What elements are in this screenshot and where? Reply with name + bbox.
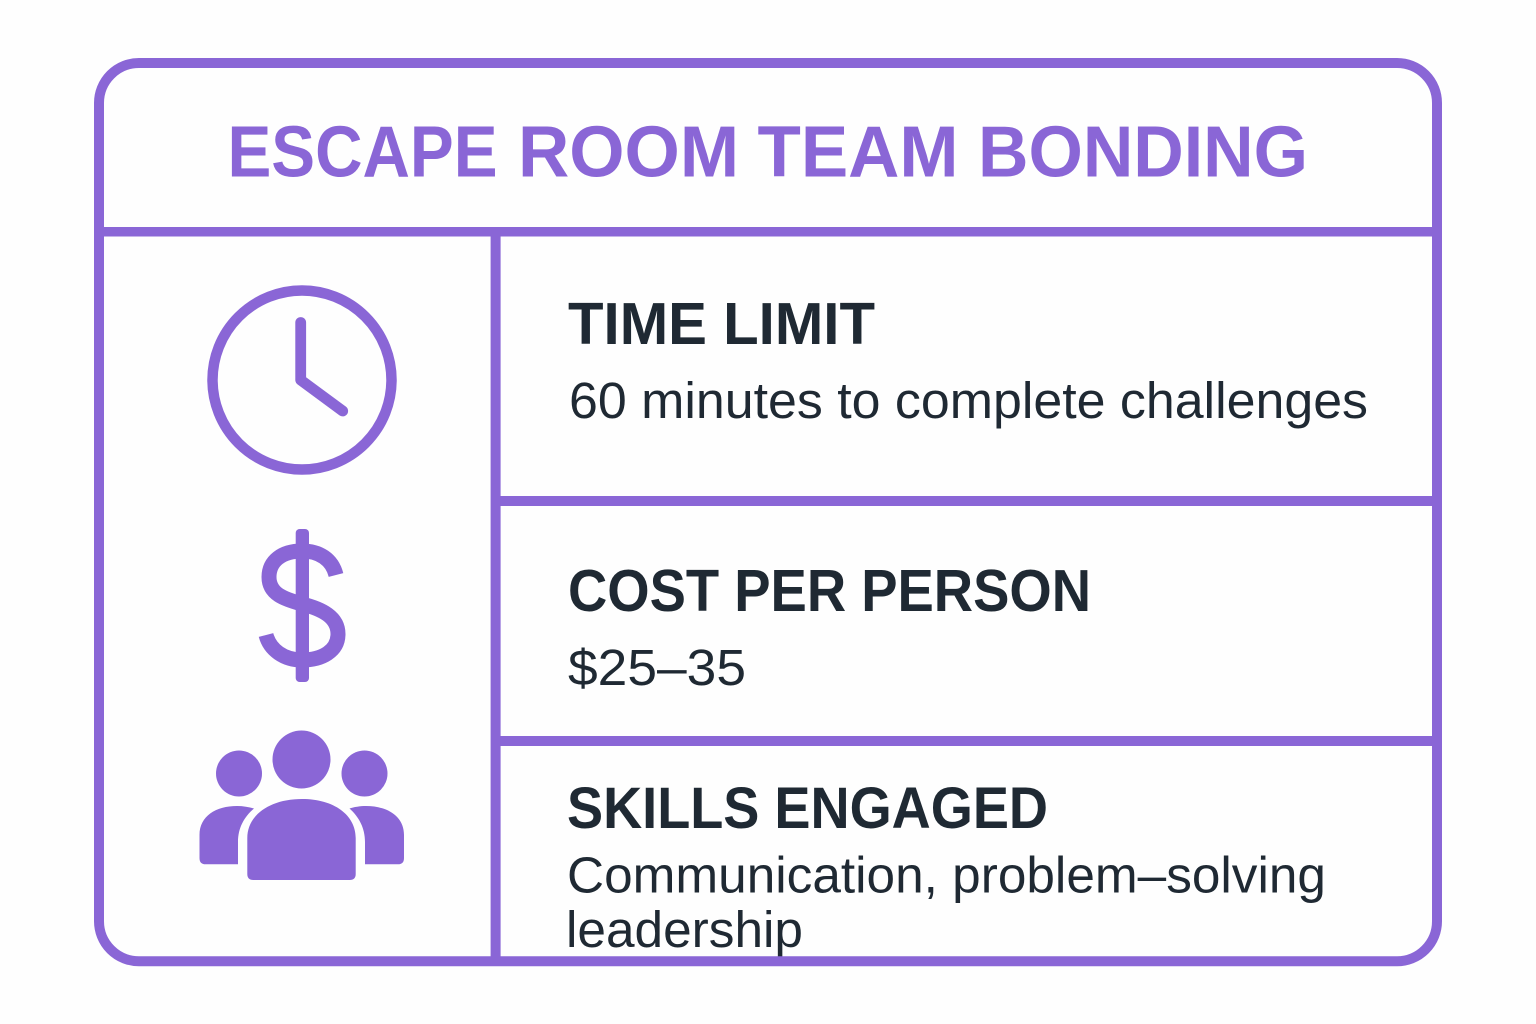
heading: skills engaged: SKILLS ENGAGED	[567, 776, 1048, 841]
text: skills detail line 1: Communication, problem–solving	[567, 846, 1326, 904]
panel: outer frame	[99, 63, 1437, 961]
icon: clock	[212, 290, 392, 470]
title: BONDING	[978, 112, 1308, 192]
icon: dollar sign	[266, 529, 338, 682]
text: time limit detail: 60 minutes to complete challenges	[569, 372, 1368, 429]
icon: team of people	[200, 730, 404, 880]
text: skills detail line 2: leadership	[566, 901, 803, 958]
heading: time limit: TIME LIMIT	[568, 291, 875, 357]
title	[228, 112, 1308, 192]
title: ESCAPE	[228, 112, 498, 192]
text: cost detail: $25–35	[568, 639, 746, 696]
title: TEAM	[758, 112, 958, 192]
title: ROOM	[518, 112, 739, 192]
heading: cost per person: COST PER PERSON	[568, 558, 1091, 624]
